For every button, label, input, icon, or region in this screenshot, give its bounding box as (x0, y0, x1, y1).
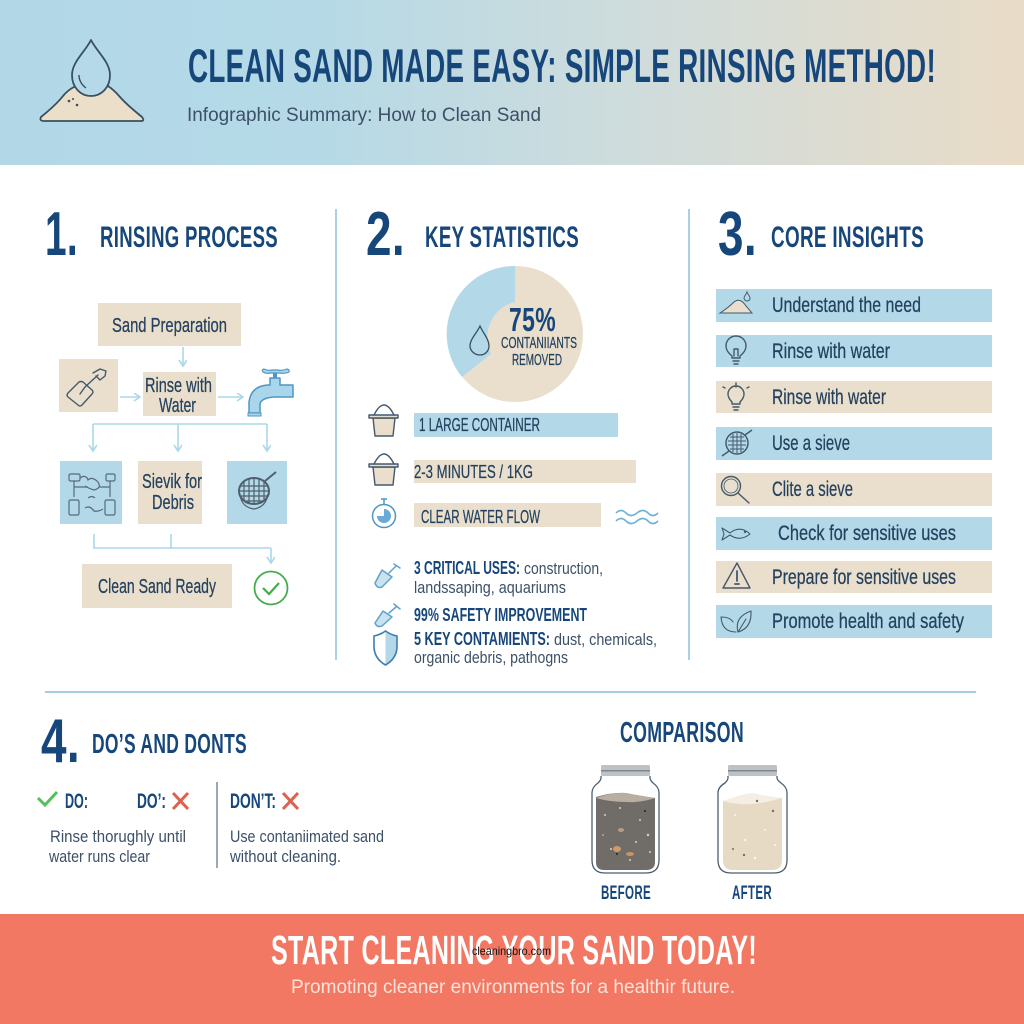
panel: do's and don'ts (38, 707, 384, 868)
insight row: rinse with water: Rinse with water (772, 386, 886, 409)
box: rinse with water: Water (159, 395, 196, 417)
icon: bucket (369, 405, 398, 436)
icon: green check (254, 572, 288, 604)
watermark: cleaningbro.com (472, 944, 551, 958)
do text (48, 828, 186, 866)
pie label: REMOVED (512, 352, 562, 369)
box: sand preparation: Sand Preparation (112, 315, 227, 337)
icon: drop (470, 326, 489, 355)
icon: stopwatch (372, 499, 396, 528)
box: clean sand ready (82, 564, 232, 608)
pie label: CONTANIIANTS (501, 335, 577, 352)
icon: bucket (369, 454, 398, 485)
stat: key contaminants: 5 KEY CONTAMIENTS: (414, 629, 550, 649)
tagline: Promoting cleaner environments for a healthir future. (291, 977, 735, 998)
box: rinse with water (143, 372, 216, 417)
icon: shield (374, 631, 397, 665)
pie chart: 75% contaminants removed (447, 266, 583, 402)
icon: green check (38, 792, 57, 805)
icon: trowel (375, 564, 400, 588)
insight row: use a sieve (716, 427, 992, 460)
do text: water runs clear (48, 848, 150, 866)
icon box: sieve (227, 461, 287, 524)
stat: critical uses (414, 558, 603, 597)
panel: rinsing process (45, 200, 293, 608)
stat bar: minutes per kg: 2-3 MINUTES / 1KG (414, 462, 533, 482)
label: after: AFTER (732, 883, 772, 904)
panel: core insights (716, 200, 992, 638)
icon: shovel box (59, 359, 118, 412)
heading: rinsing process: RINSING PROCESS (100, 221, 278, 254)
don't text (229, 828, 384, 866)
insight row: rinse with water (716, 381, 992, 413)
stat: key contaminants (414, 629, 657, 667)
heading: do's and don'ts: DO’S AND DONTS (92, 728, 247, 759)
stat: key contaminants: organic debris, pathogns (414, 648, 568, 667)
divider lines (45, 209, 976, 692)
don't text: Use contaniimated sand (230, 828, 384, 846)
box: sieve for debris: Debris (152, 492, 194, 514)
stat: key contaminants: dust, chemicals, (554, 630, 657, 649)
heading: core insights: CORE INSIGHTS (771, 221, 924, 254)
stat bar: large container: 1 LARGE CONTAINER (419, 415, 540, 435)
stat bar: clear water flow: CLEAR WATER FLOW (421, 507, 540, 527)
jar: after (718, 765, 787, 873)
box: rinse with water: Rinse with (145, 375, 212, 397)
stat: critical uses: construction, (524, 559, 603, 578)
insight row: promote health and safety (716, 605, 992, 638)
footer banner (0, 914, 1024, 1024)
insight row: rinse with water: Rinse with water (772, 340, 890, 363)
insight row: understand the need (716, 289, 992, 322)
subtitle: Infographic Summary: How to Clean Sand (187, 105, 541, 126)
arrow right (120, 396, 140, 398)
section number 1: 1. (45, 200, 78, 269)
box: clean sand ready: Clean Sand Ready (98, 576, 216, 598)
insight row: understand the need: Understand the need (772, 294, 921, 317)
pie label (501, 335, 577, 369)
do text: Rinse thorughly until (50, 828, 186, 846)
box: sieve for debris (138, 461, 202, 524)
branching arrows (93, 424, 267, 451)
panel: key statistics (366, 200, 658, 667)
label: before: BEFORE (601, 883, 651, 904)
stat bar: minutes per kg (414, 460, 636, 483)
icon box: filtration diagram (60, 461, 122, 524)
icon: water waves (616, 510, 658, 524)
insight row: promote health and safety: Promote health and safety (772, 610, 964, 633)
stat: critical uses: 3 CRITICAL USES: (414, 558, 520, 578)
arrow down (182, 347, 184, 366)
insight row: check for sensitive uses (716, 517, 992, 550)
do label: DO: (65, 790, 88, 813)
jar: before (592, 765, 659, 873)
insight row: prepare for sensitive uses: Prepare for sensitive uses (772, 566, 956, 589)
panel: comparison (592, 717, 787, 904)
arrow right (218, 396, 243, 398)
header banner (0, 0, 1024, 165)
section number 3: 3. (718, 200, 757, 269)
section number 4: 4. (41, 707, 80, 776)
section number 2: 2. (366, 200, 405, 269)
insight row: prepare for sensitive uses (716, 561, 992, 593)
merging arrows (94, 534, 271, 563)
insight row: use a sieve: Use a sieve (772, 432, 850, 455)
insight row: clite a sieve: Clite a sieve (772, 478, 853, 501)
box: sieve for debris: Sievik for (142, 471, 202, 493)
insight row: clite a sieve (716, 473, 992, 506)
icon: water drop on sand pile (40, 40, 143, 121)
value 75%: 75% (509, 301, 556, 338)
insight row: check for sensitive uses: Check for sensitive uses (778, 522, 956, 545)
heading: key statistics: KEY STATISTICS (425, 221, 579, 254)
icon: trowel (375, 604, 400, 627)
don't label with cross: DON’T: (230, 790, 276, 813)
do label with cross: DO’: (137, 790, 166, 813)
box: sand preparation (98, 303, 241, 346)
icon: faucet (248, 369, 293, 416)
heading: comparison: COMPARISON (620, 717, 744, 749)
stat: critical uses: landssaping, aquariums (414, 578, 566, 597)
insight row: rinse with water (716, 335, 992, 367)
stat: safety improvement: 99% SAFETY IMPROVEMENT (414, 605, 587, 625)
don't text: without cleaning. (229, 848, 341, 866)
